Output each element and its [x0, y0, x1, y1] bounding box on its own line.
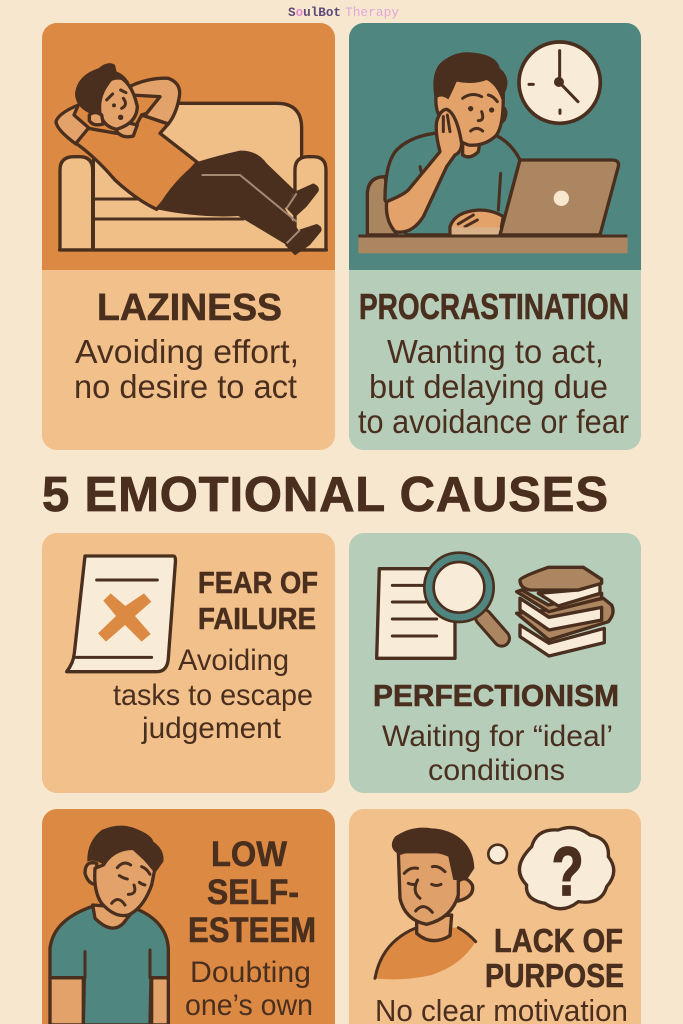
description: Waiting for “ideal’ — [382, 720, 613, 753]
illustration: confused man with thought bubble: ? — [552, 834, 584, 910]
description — [74, 333, 299, 405]
panel: laziness — [42, 23, 335, 450]
icon: document, magnifier and books — [377, 553, 613, 658]
description: conditions — [428, 754, 565, 787]
description: but delaying due — [369, 368, 608, 405]
description: no desire to act — [74, 368, 297, 405]
description — [185, 956, 313, 1022]
illustration: man lounging on couch — [56, 63, 327, 255]
description: Avoiding effort, — [75, 333, 299, 370]
heading — [188, 835, 316, 950]
description — [113, 644, 313, 745]
heading — [485, 922, 624, 994]
panel: perfectionism — [349, 533, 641, 793]
heading: PERFECTIONISM — [373, 678, 619, 713]
title: 5 EMOTIONAL CAUSES — [42, 468, 608, 522]
heading — [198, 565, 318, 636]
clock — [519, 42, 600, 123]
description — [358, 333, 629, 440]
heading: SELF- — [207, 873, 299, 912]
description: Avoiding — [178, 644, 289, 677]
panel: low self-esteem — [42, 809, 335, 1024]
heading: LOW — [211, 835, 287, 874]
panel: fear of failure — [42, 533, 335, 793]
watermark: SoulBot Therapy: Therapy — [345, 5, 399, 20]
watermark: SoulBot Therapy: SoulBot — [288, 5, 341, 20]
heading: PURPOSE — [485, 957, 624, 994]
heading: FAILURE — [198, 601, 316, 636]
panel: procrastination — [349, 23, 641, 450]
description: tasks to escape — [113, 679, 313, 712]
heading: LACK OF — [494, 922, 623, 959]
heading: ESTEEM — [188, 911, 316, 950]
illustration: sad man — [50, 826, 168, 1024]
illustration: confused man with thought bubble — [375, 828, 614, 979]
description: to avoidance or fear — [358, 403, 629, 440]
description — [382, 720, 613, 787]
description: judgement — [141, 712, 282, 745]
illustration: man at laptop with clock — [358, 42, 628, 253]
description: Wanting to act, — [387, 333, 604, 370]
heading: FEAR OF — [198, 565, 318, 600]
watermark: SoulBot Therapy — [288, 5, 399, 20]
description: one’s own — [185, 989, 313, 1022]
heading: LAZINESS — [97, 287, 282, 329]
icon: failed paper — [67, 556, 175, 672]
description: Doubting — [190, 956, 311, 989]
panel: lack of purpose — [349, 809, 641, 1024]
